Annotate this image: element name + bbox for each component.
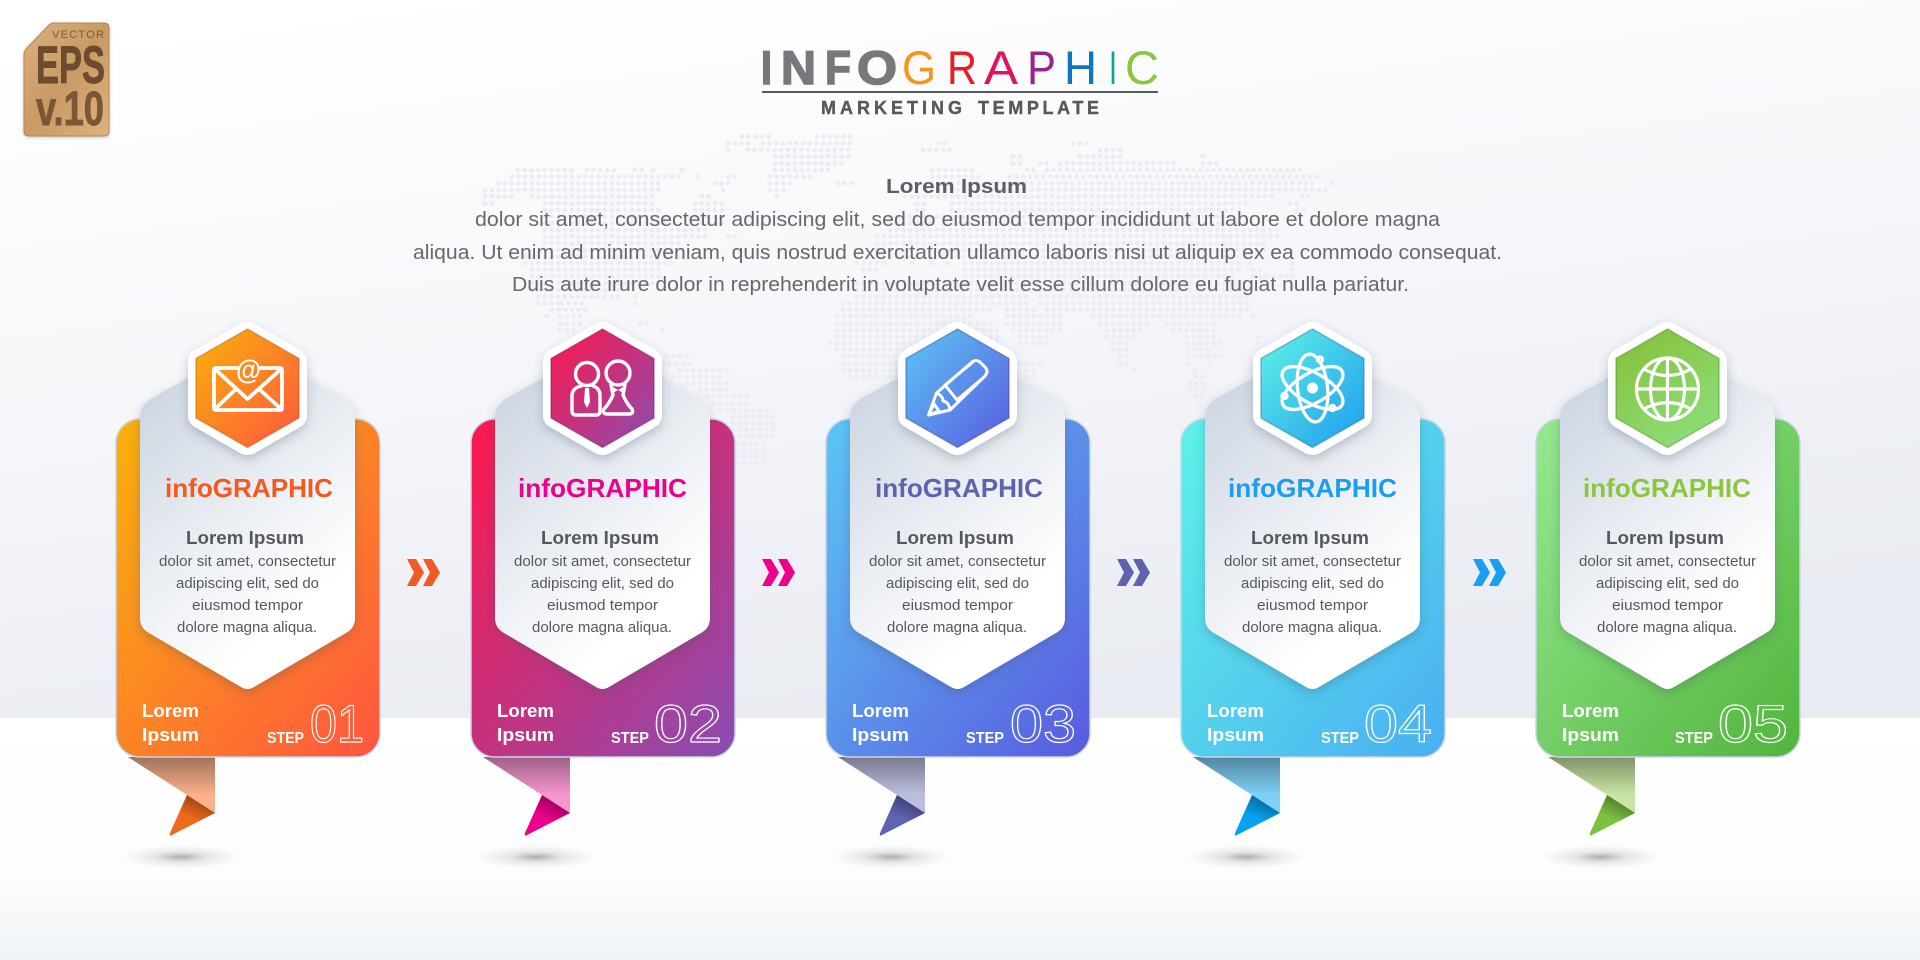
footer label: Ipsum <box>852 725 909 745</box>
card text: adipiscing elit, sed do <box>176 575 319 592</box>
card text: dolor sit amet, consectetur <box>1579 553 1756 570</box>
step number: STEP <box>966 730 1004 747</box>
card text: dolor sit amet, consectetur <box>1224 553 1401 570</box>
step number <box>1675 695 1788 754</box>
card text: eiusmod tempor <box>1257 597 1368 614</box>
footer label <box>1207 701 1264 745</box>
card heading: infoGRAPHIC <box>1228 473 1397 503</box>
ribbon fold <box>128 757 215 836</box>
card text: adipiscing elit, sed do <box>886 575 1029 592</box>
card text: adipiscing elit, sed do <box>531 575 674 592</box>
dotted world map <box>485 137 1332 463</box>
card text <box>159 528 336 636</box>
card text: Lorem Ipsum <box>1251 528 1369 548</box>
card text: eiusmod tempor <box>192 597 303 614</box>
step 5 <box>1536 322 1800 869</box>
card heading: infoGRAPHIC <box>518 473 687 503</box>
badge: EPS vector v.10: v.10 <box>36 83 104 136</box>
arrow 2 <box>762 559 795 586</box>
step number: 03 <box>1010 695 1076 754</box>
title: R <box>947 41 977 94</box>
intro text block <box>413 176 1502 296</box>
card text: eiusmod tempor <box>547 597 658 614</box>
icon: people <box>543 322 662 455</box>
step number: STEP <box>267 730 304 747</box>
inner hexagon panel <box>850 345 1065 689</box>
background floor <box>0 718 1920 960</box>
ribbon fold <box>1193 757 1280 836</box>
arrow 1 <box>407 559 440 586</box>
card text: Lorem Ipsum <box>541 528 659 548</box>
footer label: Ipsum <box>497 725 554 745</box>
card text: dolor sit amet, consectetur <box>869 553 1046 570</box>
title: G <box>902 41 936 94</box>
intro text block: Duis aute irure dolor in reprehenderit in voluptate velit esse cillum dolore eu fugiat nulla pariatur. <box>512 274 1409 296</box>
step number <box>611 695 722 754</box>
arrow 4 <box>1473 559 1506 586</box>
subtitle: TEMPLATE <box>978 98 1099 118</box>
card body <box>471 419 735 757</box>
card body <box>1181 419 1445 757</box>
ground shadow <box>1541 845 1661 869</box>
step 1 <box>116 322 380 869</box>
footer label: Ipsum <box>1207 725 1264 745</box>
step 3 <box>826 322 1090 869</box>
card text <box>514 528 691 636</box>
ground shadow <box>1186 845 1306 869</box>
title: A <box>984 41 1019 94</box>
title: I <box>761 41 772 94</box>
title: N <box>781 41 816 94</box>
footer label: Lorem <box>1207 701 1264 721</box>
intro text block: dolor sit amet, consectetur adipiscing elit, sed do eiusmod tempor incididunt ut labore et dolore magna <box>475 209 1441 231</box>
card heading: infoGRAPHIC <box>165 473 333 503</box>
intro text block: Lorem Ipsum <box>886 176 1027 198</box>
step number: STEP <box>1675 730 1713 747</box>
ribbon fold <box>483 757 570 836</box>
step number <box>966 695 1076 754</box>
card text <box>1579 528 1756 636</box>
footer label <box>852 701 909 745</box>
step number: 02 <box>654 695 722 754</box>
intro text block: aliqua. Ut enim ad minim veniam, quis nostrud exercitation ullamco laboris nisi ut aliquip ex ea commodo consequat. <box>413 242 1502 264</box>
card heading: infoGRAPHIC <box>875 473 1043 503</box>
step number: 04 <box>1364 695 1432 754</box>
card text: eiusmod tempor <box>902 597 1013 614</box>
step number: 05 <box>1718 695 1788 754</box>
title: I <box>1109 41 1117 94</box>
background wall <box>0 0 1920 718</box>
card text: Lorem Ipsum <box>186 528 304 548</box>
step 4 <box>1181 322 1445 869</box>
badge: EPS vector v.10: VECTOR <box>52 29 104 41</box>
footer label: Lorem <box>497 701 554 721</box>
card text: adipiscing elit, sed do <box>1596 575 1739 592</box>
footer label: Lorem <box>1562 701 1619 721</box>
footer label <box>142 701 199 745</box>
footer label: Ipsum <box>142 725 199 745</box>
card text <box>869 528 1046 636</box>
ground shadow <box>476 845 596 869</box>
card text: Lorem Ipsum <box>1606 528 1724 548</box>
step number: 01 <box>310 695 364 754</box>
card text: dolor sit amet, consectetur <box>514 553 691 570</box>
footer label: Lorem <box>142 701 199 721</box>
step 2 <box>471 322 735 869</box>
card text: dolore magna aliqua. <box>532 619 672 636</box>
title: C <box>1125 41 1159 94</box>
title: H <box>1064 41 1097 94</box>
step number: STEP <box>1321 730 1359 747</box>
step number <box>267 695 364 754</box>
inner hexagon panel <box>1560 345 1775 689</box>
ground shadow <box>831 845 951 869</box>
icon: globe <box>1608 322 1727 455</box>
card text: adipiscing elit, sed do <box>1241 575 1384 592</box>
card text: dolore magna aliqua. <box>887 619 1027 636</box>
inner hexagon panel <box>1205 345 1420 689</box>
footer label: Ipsum <box>1562 725 1619 745</box>
subtitle: MARKETING <box>821 98 962 118</box>
card text: dolore magna aliqua. <box>1597 619 1737 636</box>
subtitle <box>821 98 1099 118</box>
card text: Lorem Ipsum <box>896 528 1014 548</box>
step number: STEP <box>611 730 649 747</box>
inner hexagon panel <box>140 345 355 689</box>
step number <box>1321 695 1432 754</box>
card text: dolore magna aliqua. <box>1242 619 1382 636</box>
badge: EPS vector v.10: EPS <box>36 36 105 95</box>
title: P <box>1027 41 1056 94</box>
footer label: Lorem <box>852 701 909 721</box>
card body <box>1536 419 1800 757</box>
icon: atom <box>1253 322 1372 455</box>
footer label <box>1562 701 1619 745</box>
footer label <box>497 701 554 745</box>
arrow 3 <box>1117 559 1150 586</box>
card text: dolore magna aliqua. <box>177 619 317 636</box>
card text: dolor sit amet, consectetur <box>159 553 336 570</box>
title: O <box>857 41 897 94</box>
ribbon fold <box>1548 757 1635 836</box>
ribbon fold <box>838 757 925 836</box>
badge: EPS vector v.10 <box>24 23 109 136</box>
inner hexagon panel <box>495 345 710 689</box>
ground shadow <box>121 845 241 869</box>
card text <box>1224 528 1401 636</box>
card body <box>116 419 380 757</box>
title <box>761 41 1159 94</box>
icon: envelope <box>188 322 307 455</box>
card text: eiusmod tempor <box>1612 597 1723 614</box>
card body <box>826 419 1090 757</box>
title: F <box>825 41 851 94</box>
icon: envelope: @ <box>236 354 261 385</box>
icon: pencil <box>898 322 1017 455</box>
card heading: infoGRAPHIC <box>1583 473 1751 503</box>
